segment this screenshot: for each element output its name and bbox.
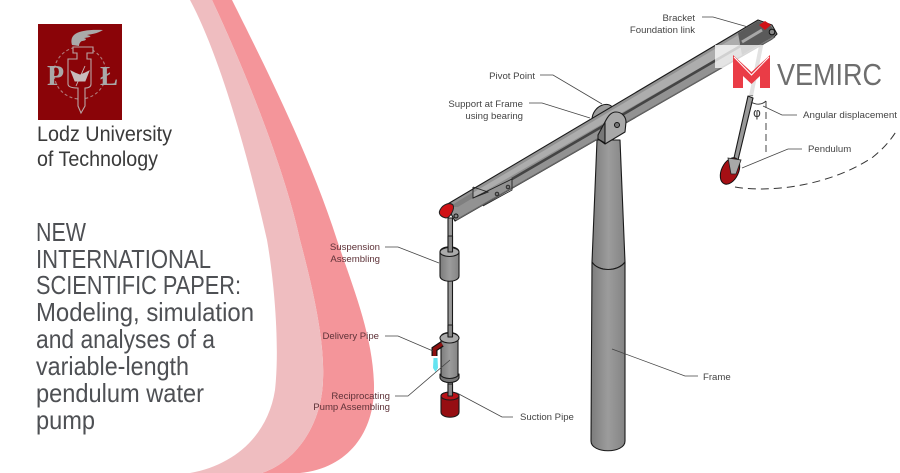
VEMIRC wordmark: VEMIRC — [777, 58, 882, 92]
pump rod — [448, 218, 452, 392]
headline text: pump — [36, 405, 95, 435]
labels: using bearing — [465, 111, 523, 122]
water — [433, 358, 438, 372]
headline text: SCIENTIFIC PAPER: — [36, 270, 241, 300]
upper pendulum rods (behind logo) — [751, 36, 763, 96]
pendulum bob — [716, 155, 744, 187]
leader lines — [385, 17, 802, 417]
VEMIRC watermark panel — [715, 45, 772, 95]
labels: Frame — [703, 372, 731, 383]
headline text: pendulum water — [36, 378, 204, 408]
labels: Suction Pipe — [520, 412, 574, 423]
swoosh: light pink band — [190, 0, 323, 473]
logo: letter L: Ł — [100, 61, 118, 91]
headline text: Modeling, simulation — [36, 297, 254, 327]
logo: letter P: P — [47, 61, 64, 92]
headline text: INTERNATIONAL — [36, 244, 211, 274]
labels: Assembling — [330, 254, 380, 265]
labels: Angular displacement — [803, 110, 897, 121]
beam: slider bracket — [473, 179, 512, 206]
frame column — [591, 140, 625, 451]
beam: lower edge shade — [456, 37, 775, 220]
beam: right red cap — [759, 21, 771, 30]
logo: torch and shield — [68, 47, 93, 113]
swoosh: dark pink band — [212, 0, 374, 473]
beam: right light strip — [742, 30, 762, 42]
university name — [37, 123, 172, 171]
logo: boat — [71, 66, 89, 86]
labels: Suspension — [330, 242, 380, 253]
labels — [313, 13, 897, 423]
phi symbol: φ — [753, 106, 761, 120]
university name: of Technology — [37, 148, 158, 171]
logo: flame — [71, 30, 103, 46]
labels: Foundation link — [630, 25, 695, 36]
headline text: and analyses of a — [36, 324, 215, 354]
beam: right dark section — [738, 21, 776, 55]
angle guide — [735, 101, 897, 189]
labels: Delivery Pipe — [322, 331, 379, 342]
beam: left dark section — [449, 192, 473, 207]
headline text — [36, 217, 254, 435]
university logo — [38, 24, 122, 120]
pivot hump — [592, 104, 613, 122]
pendulum arm — [734, 96, 753, 160]
delivery pipe red — [434, 344, 442, 356]
labels: Bracket — [662, 13, 695, 24]
pivot bracket — [598, 112, 626, 144]
reciprocating pump cylinder — [440, 325, 459, 382]
labels: Support at Frame — [448, 99, 523, 110]
labels: Pivot Point — [489, 71, 535, 82]
beam: groove — [512, 30, 768, 179]
swing arc — [735, 130, 897, 189]
labels: Reciprocating — [331, 391, 390, 402]
delivery pipe — [434, 344, 442, 356]
labels: Pump Assembling — [313, 402, 390, 413]
logo: gear — [54, 47, 106, 99]
headline text: variable-length — [36, 351, 189, 381]
beam: top face — [449, 24, 766, 207]
university name: Lodz University — [37, 123, 172, 146]
beam — [439, 20, 777, 221]
beam: left red cap — [439, 204, 453, 218]
VEMIRC logo mark — [733, 55, 770, 88]
suspension assembling — [440, 236, 459, 281]
suction pipe — [441, 384, 459, 417]
labels: Pendulum — [808, 144, 851, 155]
headline text: NEW — [36, 217, 86, 247]
